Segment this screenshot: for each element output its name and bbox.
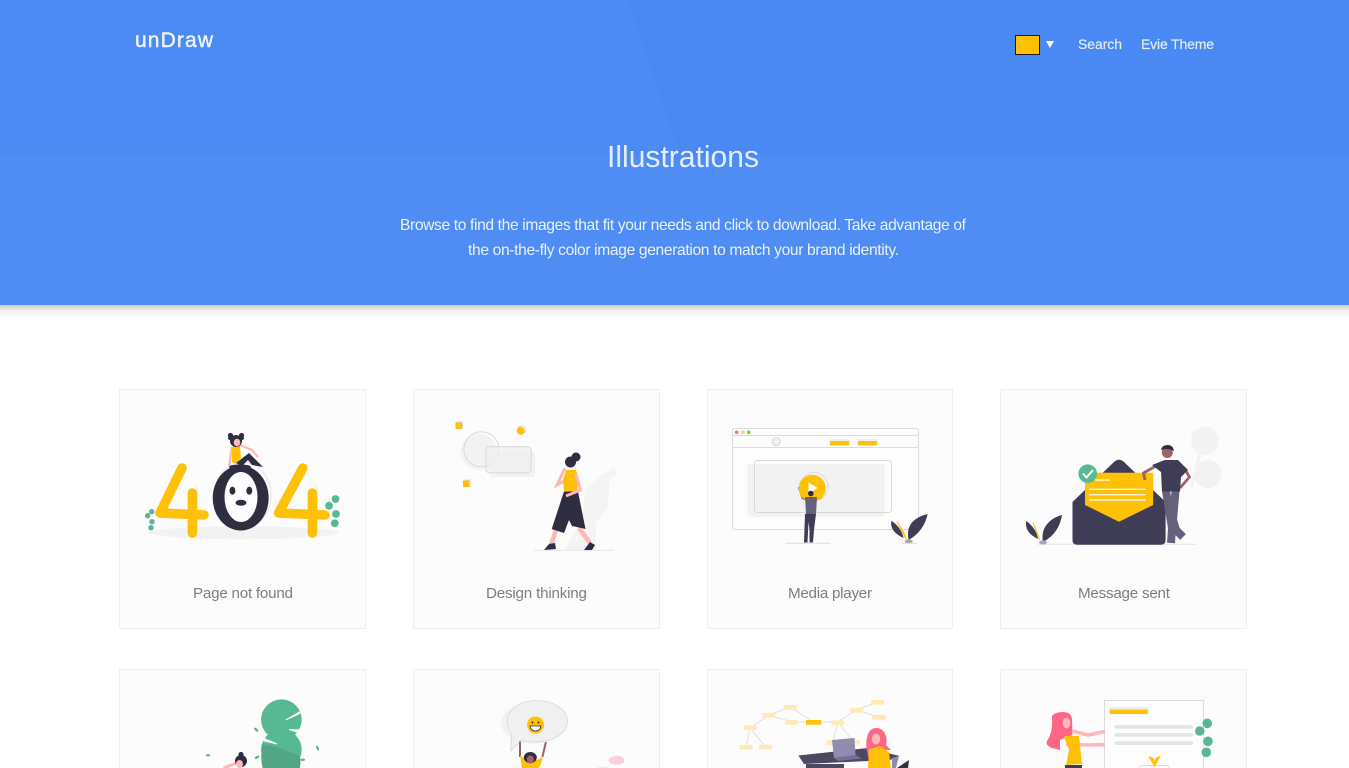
nav link: Evie Theme: Evie Theme xyxy=(1141,36,1214,52)
illustration: woman with emoji bubble xyxy=(501,700,625,768)
illustration: video window with man xyxy=(732,428,928,544)
card: row 2, speech bubble xyxy=(414,670,660,768)
illustration: mind map and woman at desk xyxy=(740,700,909,768)
description text: the on-the-fly color image generation to match your brand identity. xyxy=(468,242,899,259)
header band xyxy=(0,0,1349,318)
card: row 2, form xyxy=(1000,670,1246,768)
illustration: envelope with man xyxy=(1026,427,1222,545)
card: Design thinking xyxy=(414,390,660,628)
illustration: 404 xyxy=(145,433,340,539)
card: Media player xyxy=(708,390,952,628)
illustration: woman with form sheet xyxy=(1047,700,1213,768)
title: Illustrations xyxy=(607,139,759,174)
card: row 2, cactus xyxy=(120,670,366,768)
card: row 2, mind map xyxy=(708,670,952,768)
card: Page not found xyxy=(120,390,366,628)
illustration: woman walking with shapes xyxy=(456,422,617,550)
logo: unDraw: unDraw xyxy=(135,29,214,52)
colour picker xyxy=(1016,36,1054,54)
label: Message sent xyxy=(1078,585,1171,602)
label: Media player xyxy=(788,585,872,602)
label: Design thinking xyxy=(486,585,587,602)
description text: Browse to find the images that fit your needs and click to download. Take advantage of xyxy=(400,217,967,234)
description text xyxy=(400,217,967,259)
illustration: green plant with person xyxy=(206,699,320,768)
label: Page not found xyxy=(193,585,293,602)
card: Message sent xyxy=(1000,390,1246,628)
nav link: Search: Search xyxy=(1078,36,1122,52)
